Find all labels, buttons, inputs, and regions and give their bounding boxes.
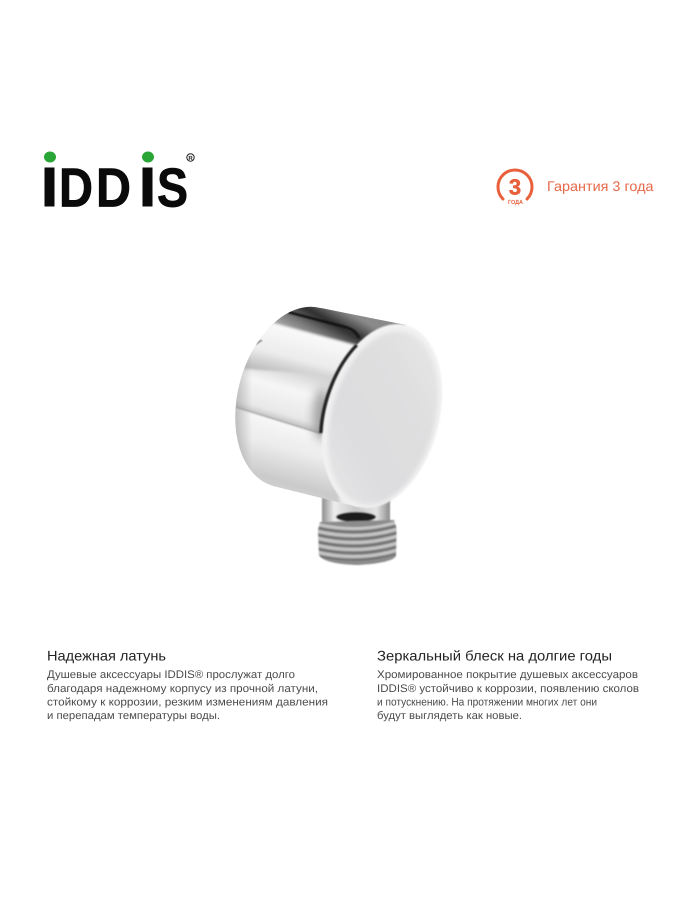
dark top reflection (272, 306, 406, 346)
middle reflection band (236, 368, 332, 432)
right shading near rim (313, 389, 331, 441)
icon: 3 year ring (498, 170, 532, 206)
logo wordmark: S (157, 156, 188, 218)
feature body text: и потускнению. На протяжении многих лет они (377, 696, 597, 708)
thread ridges (316, 518, 398, 566)
feature heading: Надежная латунь (47, 648, 166, 664)
threaded connector (316, 496, 398, 566)
warranty label: Гарантия 3 года (547, 178, 654, 194)
feature body text: Душевые аксессуары IDDIS® прослужат долго (47, 669, 295, 681)
logo registered mark (187, 154, 194, 162)
icon: 3 year ring: 3 (509, 174, 521, 200)
warranty badge (498, 170, 654, 206)
lower reflection band (240, 411, 341, 502)
connector neck (322, 496, 390, 528)
feature: mirror shine (377, 648, 639, 722)
left edge shading (235, 364, 250, 465)
logo wordmark (44, 156, 188, 218)
black reflection line (288, 312, 359, 338)
feature body text: и перепадам температуры воды. (47, 710, 220, 722)
feature heading: Зеркальный блеск на долгие годы (377, 648, 612, 664)
chrome cylinder body (235, 306, 406, 507)
logo green dots (44, 152, 154, 162)
logo registered mark: R (188, 155, 193, 162)
feature body text (47, 669, 328, 722)
feature: brass (47, 648, 328, 722)
logo: IDDIS (44, 152, 194, 218)
logo wordmark: D (59, 156, 93, 218)
feature body text: будут выглядеть как новые. (377, 710, 522, 722)
feature body text: благодаря надежному корпусу из прочной латуни, (47, 683, 318, 695)
feature body text: стойкому к коррозии, резким изменениям давления (47, 696, 328, 708)
feature body text (377, 669, 639, 722)
logo wordmark: D (96, 156, 131, 218)
seam line (236, 407, 320, 433)
product photo: chrome shower outlet (235, 306, 442, 566)
upper reflection band (244, 323, 354, 375)
icon: 3 year ring: ГОДА (508, 199, 524, 206)
face rim shadow (321, 345, 357, 433)
feature body text: IDDIS® устойчиво к коррозии, появлению сколов (377, 683, 639, 695)
left nick (254, 340, 262, 345)
round front face (303, 310, 461, 522)
feature body text: Хромированное покрытие душевых аксессуаров (377, 669, 638, 681)
